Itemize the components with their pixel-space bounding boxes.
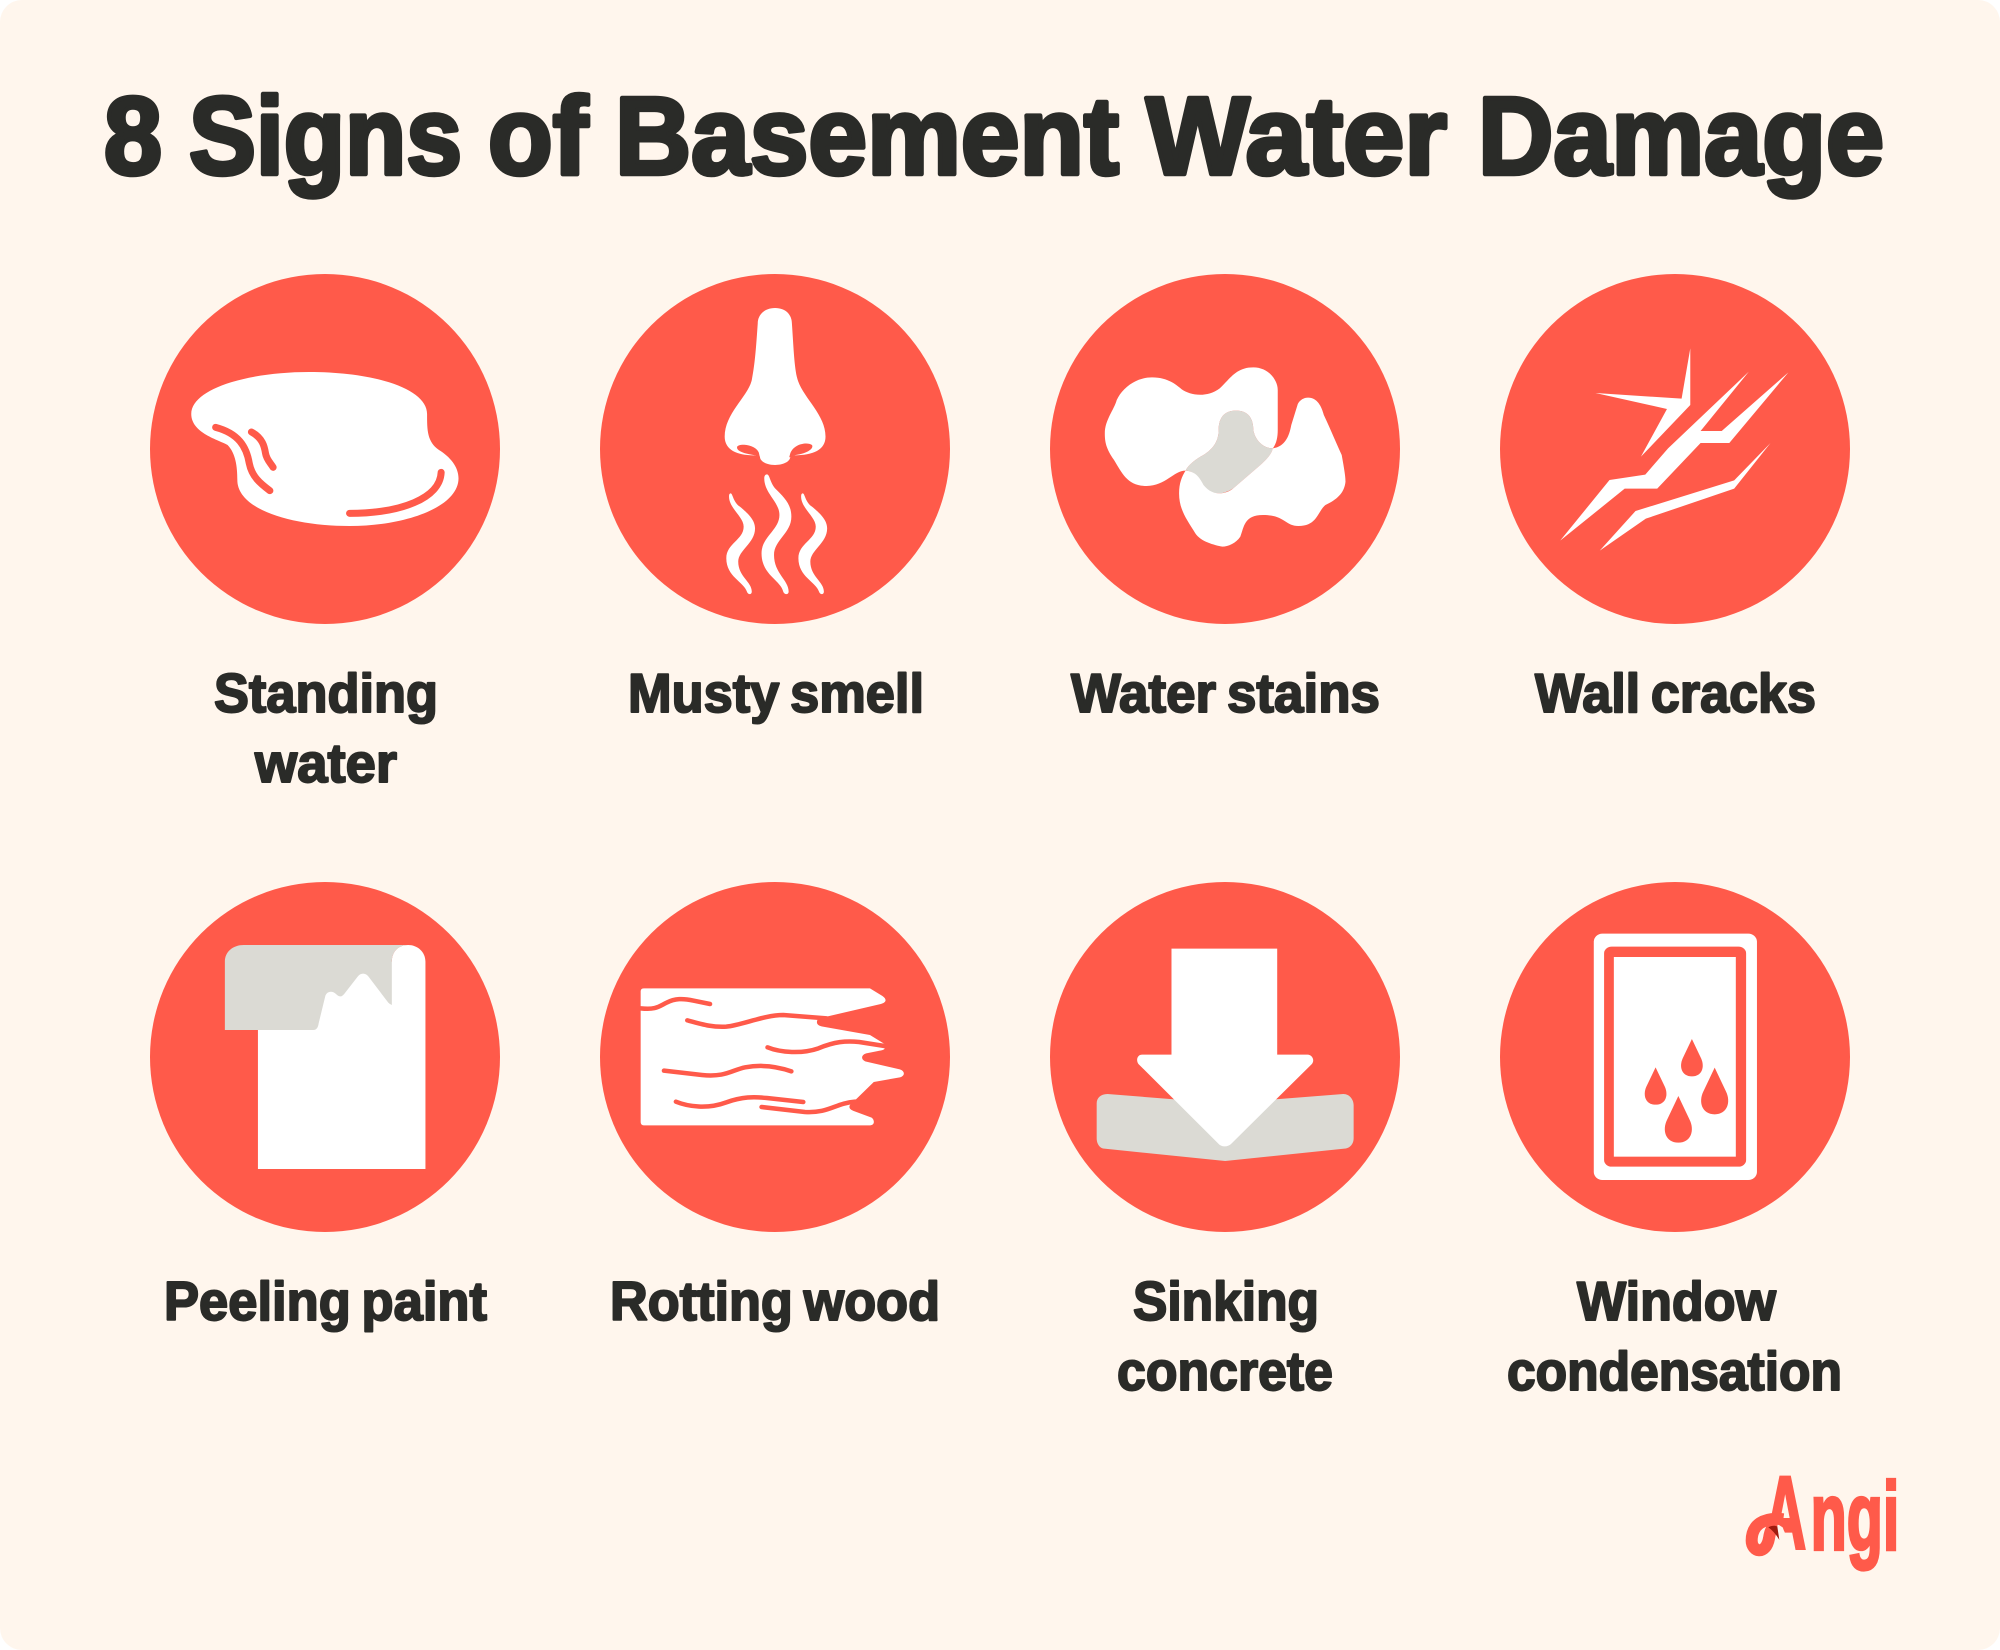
icon background circle: wall cracks [1500,274,1850,624]
title: Damage [1478,75,1884,198]
label: musty smell: Musty smell [628,662,924,724]
panel: standing water [150,274,500,794]
label: sinking concrete: concrete [1117,1340,1333,1402]
title: of [488,75,588,198]
panel: rotting wood [600,882,950,1332]
label: window condensation: Window [1577,1270,1776,1332]
icon: rotting plank [641,988,904,1125]
icon background circle: water stains [1050,274,1400,624]
panel: peeling paint [150,882,500,1332]
panel: wall cracks [1500,274,1850,724]
icon background circle: peeling paint [150,882,500,1232]
label: standing water: water [254,732,397,794]
icon background circle: window condensation [1500,882,1850,1232]
icon: window with droplets [1594,934,1757,1180]
panel: window condensation [1500,882,1850,1402]
label: rotting wood: Rotting wood [610,1270,940,1332]
title: 8 [104,75,162,198]
icon background circle: rotting wood [600,882,950,1232]
title [104,75,1884,198]
icon: puddle [191,372,459,526]
label: wall cracks: Wall cracks [1535,662,1816,724]
label: water stains: Water stains [1071,662,1380,724]
label: window condensation [1507,1270,1842,1402]
icon background circle: sinking concrete [1050,882,1400,1232]
icon background circle: musty smell [600,274,950,624]
title: Basement [615,75,1119,198]
title: Signs [189,75,462,198]
logo: Angi: ngi [1811,1462,1899,1570]
label: standing water [214,662,438,794]
panel: sinking concrete [1050,882,1400,1402]
title: Water [1146,75,1447,198]
label: peeling paint: Peeling paint [164,1270,487,1332]
label: sinking concrete: Sinking [1133,1270,1319,1332]
label: window condensation: condensation [1507,1340,1842,1402]
panel: water stains [1050,274,1400,724]
icon: arrow into concrete [1097,949,1354,1161]
logo: Angi: A [1764,1455,1806,1572]
logo: Angi [1746,1476,1896,1572]
icon: peeling paint [225,945,425,1169]
label: standing water: Standing [214,662,438,724]
panel: musty smell [600,274,950,724]
icon background circle: standing water [150,274,500,624]
label: sinking concrete [1117,1270,1333,1402]
icon: nose with odor waves [725,308,827,594]
icon: cracks [1560,348,1788,551]
icon: stains [1105,367,1346,547]
